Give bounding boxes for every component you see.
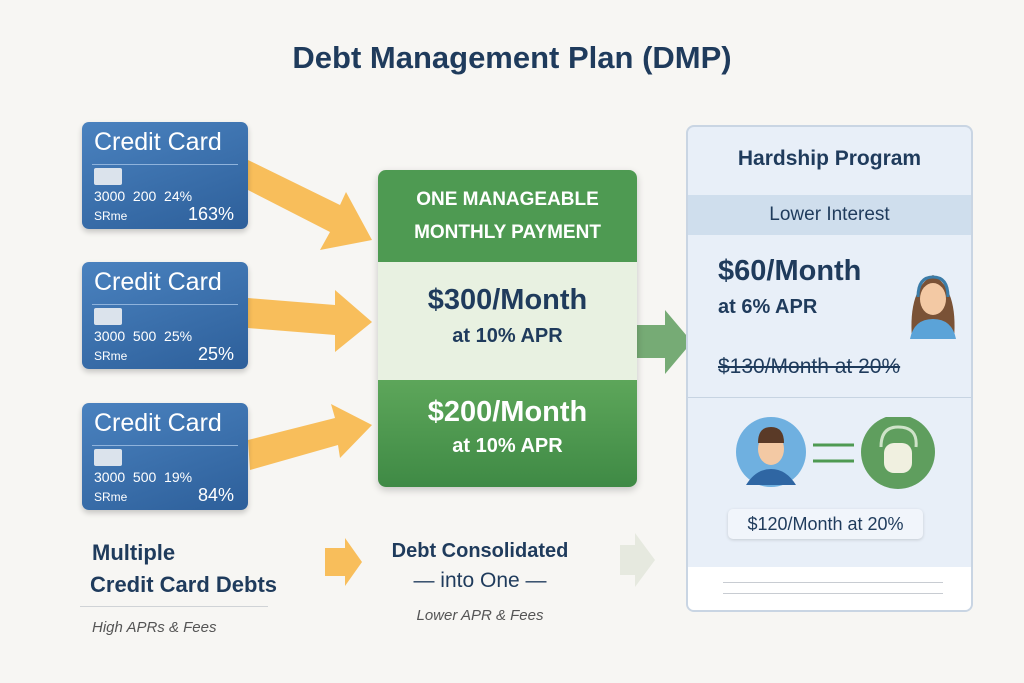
payment 300	[378, 262, 637, 380]
credit card 2: 3000 500 25%	[94, 328, 192, 344]
credit card 1: Credit Card	[94, 128, 222, 156]
text: multiple debts: High APRs & Fees	[92, 619, 216, 636]
header	[378, 170, 637, 262]
panel: hardship program	[686, 125, 973, 612]
text: consolidated	[392, 540, 568, 624]
price	[718, 255, 861, 318]
credit card 3: 3000 500 19%	[94, 469, 192, 485]
payment 200: at 10% APR	[452, 435, 563, 457]
credit card 1: 3000 200 24%	[94, 188, 192, 204]
price: $60/Month	[718, 255, 861, 287]
text: multiple debts	[80, 540, 277, 636]
callout: $120/Month at 20%	[747, 514, 904, 534]
payment 200: $200/Month	[428, 396, 587, 428]
text: consolidated: Lower APR & Fees	[416, 607, 544, 624]
payment 300: at 10% APR	[452, 325, 563, 347]
text: consolidated: — into One —	[413, 569, 547, 592]
credit card 2	[82, 262, 248, 369]
price: at 6% APR	[718, 296, 817, 318]
credit card 3: SRme	[94, 490, 127, 504]
text: multiple debts: Multiple	[92, 540, 175, 565]
subheading band	[688, 195, 971, 235]
icon: agent woman	[910, 275, 956, 339]
text: multiple debts: Credit Card Debts	[90, 572, 277, 597]
credit card 2: 25%	[198, 344, 234, 364]
panel: one payment	[378, 170, 637, 487]
strikethrough old price: $130/Month at 20%	[718, 355, 900, 378]
credit card 3: 84%	[198, 485, 234, 505]
subheading band: Lower Interest	[769, 204, 890, 225]
credit card 1: 163%	[188, 204, 234, 224]
credit card 1	[82, 122, 248, 229]
icons: agent and hand exchange	[736, 417, 935, 489]
callout	[728, 509, 923, 539]
title: Debt Management Plan (DMP)	[292, 40, 732, 75]
heading: Hardship Program	[738, 147, 921, 170]
payment 200	[378, 380, 637, 487]
text: consolidated: Debt Consolidated	[392, 540, 568, 562]
credit card 3: Credit Card	[94, 409, 222, 437]
header: ONE MANAGEABLE	[416, 189, 599, 210]
credit card 1: SRme	[94, 209, 127, 223]
header: MONTHLY PAYMENT	[414, 222, 601, 243]
credit card 2: Credit Card	[94, 268, 222, 296]
payment 300: $300/Month	[428, 284, 587, 316]
credit card 2: SRme	[94, 349, 127, 363]
credit card 3	[82, 403, 248, 510]
